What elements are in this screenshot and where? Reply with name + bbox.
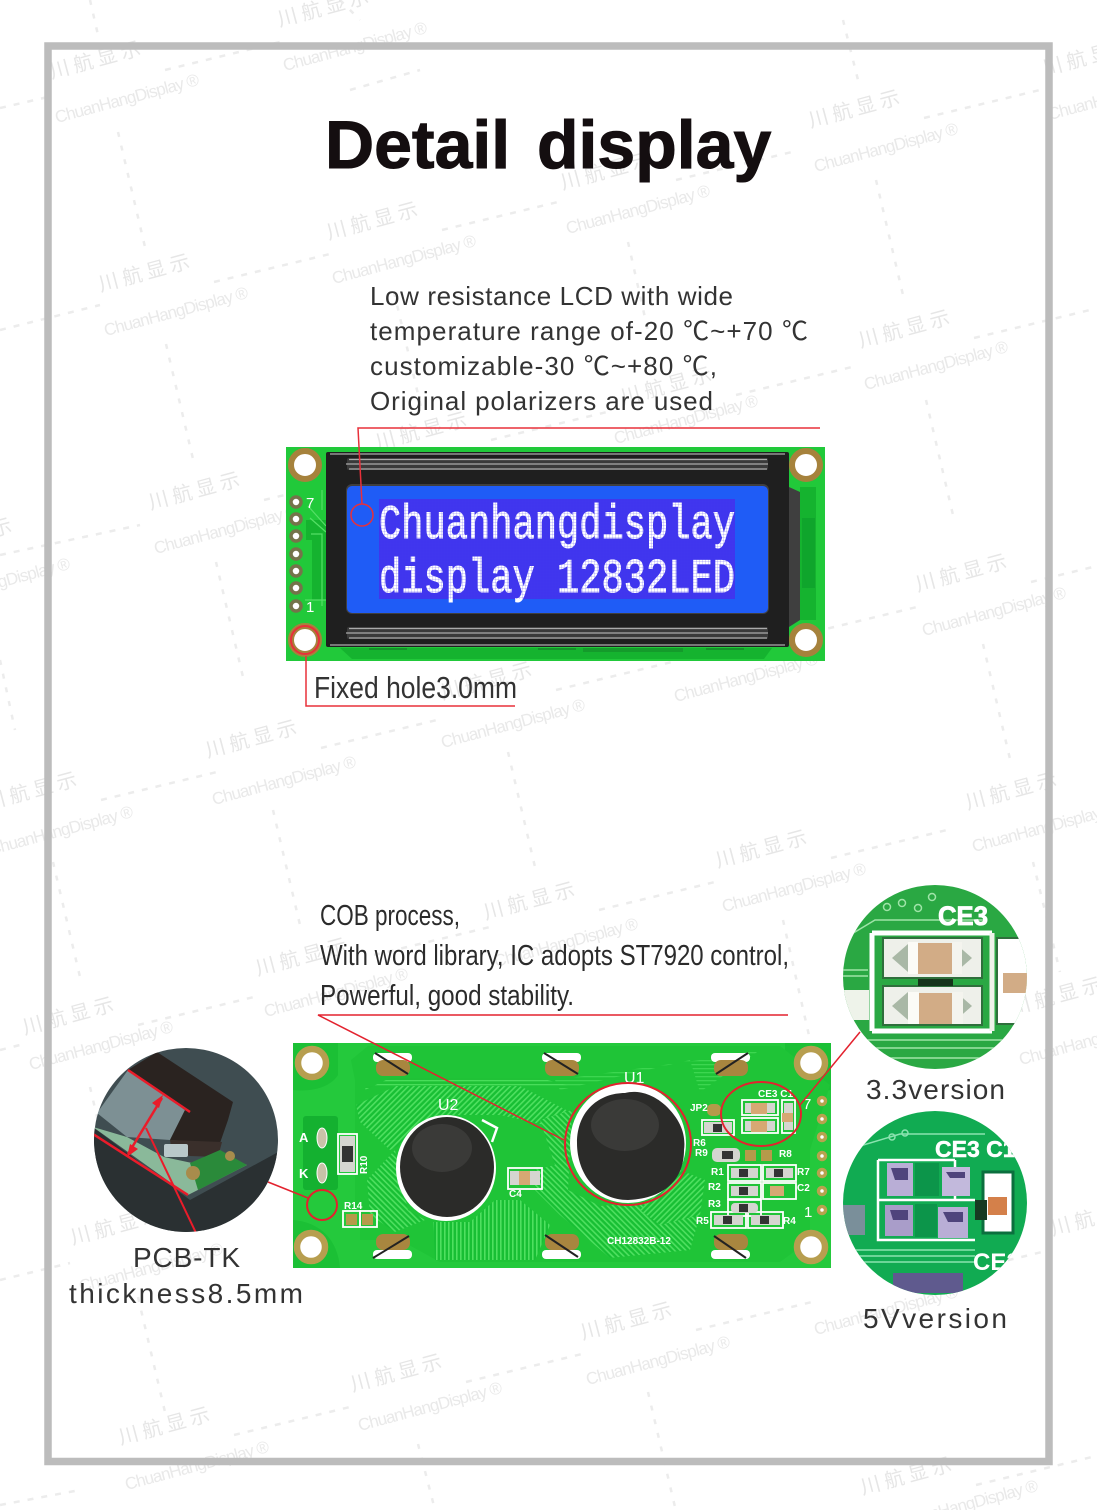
silkscreen components: JP2	[690, 1103, 708, 1114]
watermark layer: 川航显示	[963, 767, 1064, 815]
inset photo: 3.3 version	[843, 885, 1029, 1069]
callout: fixed hole	[291, 626, 517, 706]
watermark layer: 川航显示	[618, 362, 719, 410]
mounting holes	[297, 1049, 825, 1261]
pin labels	[306, 495, 314, 616]
watermark layer: ChuanHangDisplay ®	[356, 1378, 505, 1435]
watermark layer: 川航显示	[116, 1402, 217, 1450]
black plastic end	[128, 1052, 233, 1143]
watermark layer: ChuanHangDisplay ®	[27, 1017, 176, 1074]
chip U2 blob: U2	[438, 1097, 459, 1114]
text block: LCD description: temperature range of-20 ℃~+70 ℃	[370, 316, 808, 346]
chip U1 blob	[570, 1070, 686, 1203]
PCB back module	[293, 1043, 831, 1268]
mounting holes	[291, 451, 820, 654]
watermark layer: ChuanHangDisplay ®	[920, 583, 1069, 640]
silkscreen components: 1	[804, 1204, 812, 1221]
watermark layer: 川航显示	[438, 657, 539, 705]
watermark layer: 川航显示	[578, 1297, 679, 1345]
watermark layer: 川航显示	[373, 407, 474, 455]
watermark layer: ChuanHangDisplay ®	[123, 1437, 272, 1494]
chip U2 blob	[396, 1097, 497, 1221]
watermark layer: ChuanHangDisplay ®	[262, 964, 411, 1021]
watermark layer: 川航显示	[558, 147, 659, 195]
silkscreen components: C4	[509, 1189, 522, 1200]
silkscreen components: A	[299, 1130, 309, 1145]
LCD character area: display 12832LED	[379, 553, 735, 607]
watermark layer: ChuanHangDisplay ®	[720, 859, 869, 916]
silkscreen components: R8	[779, 1149, 792, 1160]
callout line: LCD	[351, 428, 820, 526]
watermark layer: 川航显示	[68, 1202, 169, 1250]
silkscreen components: R2	[708, 1182, 721, 1193]
silkscreen components: R14	[344, 1201, 363, 1212]
silkscreen components: R10	[359, 1155, 370, 1174]
watermark layer: ChuanHangDisplay ®	[812, 1282, 961, 1339]
inset photo: 5V version: CE3 C1	[935, 1136, 1016, 1162]
watermark layer: 川航显示	[913, 549, 1014, 597]
watermark layer: ChuanHangDisplay ®	[281, 18, 430, 75]
text block: COB description: Powerful, good stability.	[320, 980, 574, 1012]
text block: LCD description: Low resistance LCD with wide	[370, 281, 733, 311]
board	[93, 1127, 247, 1195]
caption: PCB thickness: thickness8.5mm	[69, 1278, 303, 1309]
board regions and trace fans	[293, 1043, 831, 1268]
watermark layer: ChuanHangDisplay ®	[612, 391, 761, 448]
inset photo: 3.3 version: CE3	[938, 901, 988, 931]
watermark layer: 川航显示	[96, 249, 197, 297]
front PCB	[286, 447, 825, 661]
caption: PCB thickness	[69, 1242, 303, 1309]
silkscreen components: 7	[803, 1096, 811, 1113]
watermark layer: ChuanHangDisplay ®	[862, 337, 1011, 394]
bezel tabs	[373, 1053, 750, 1259]
bottom edge details	[369, 648, 744, 652]
watermark layer: ChuanHangDisplay ®	[330, 231, 479, 288]
text block: LCD description: customizable-30 ℃~+80 ℃,	[370, 351, 717, 381]
callout lines: back side	[268, 1015, 860, 1220]
bezel ridges	[346, 458, 768, 639]
watermark layer: 川航显示	[20, 992, 121, 1040]
side connector	[789, 487, 800, 627]
text block: COB description	[320, 900, 789, 1012]
silkscreen components: R5	[696, 1216, 709, 1227]
watermark layer: 川航显示	[203, 715, 304, 763]
title: display	[537, 107, 771, 183]
chip U1 blob: U1	[624, 1070, 645, 1087]
LCD character area: Chuanhangdisplay	[379, 499, 735, 553]
pin pads	[291, 497, 301, 611]
watermark layer: 川航显示	[713, 825, 814, 873]
inset photo: PCB thickness	[94, 1048, 278, 1232]
watermark layer: 川航显示	[856, 305, 957, 353]
watermark layer: ChuanHangDisplay ®	[812, 119, 961, 176]
LCD front module	[286, 447, 825, 661]
caption: 3.3 version: 3.3version	[866, 1074, 1005, 1105]
silkscreen components: R1	[711, 1167, 724, 1178]
silkscreen components: K	[299, 1166, 309, 1181]
silkscreen components: CE3 C1	[758, 1089, 793, 1100]
title: Detail	[325, 107, 510, 183]
watermark layer: ChuanHangDisplay ®	[492, 914, 641, 971]
A K contacts	[317, 1128, 327, 1183]
watermark layer: 川航显示	[324, 197, 425, 245]
watermark layer: ChuanHangDisplay ®	[564, 181, 713, 238]
text block: COB description: With word library, IC adopts ST7920 control,	[320, 940, 789, 972]
caption: 5V version: 5Vversion	[863, 1303, 1007, 1334]
pin labels: 1	[306, 599, 314, 616]
watermark layer: ChuanHangDisplay ®	[102, 283, 251, 340]
title	[325, 107, 771, 183]
back PCB	[293, 1043, 831, 1268]
silkscreen components: R4	[783, 1216, 796, 1227]
text block: COB description: COB process,	[320, 900, 460, 932]
silkscreen components: CH12832B-12	[607, 1236, 671, 1247]
silkscreen components: R6	[693, 1138, 706, 1149]
watermark layer: ChuanHangDisplay ®	[210, 752, 359, 809]
watermark layer: 川航显示	[348, 1349, 449, 1397]
silkscreen components: C2	[797, 1183, 810, 1194]
watermark layer: ChuanHangDisplay ®	[439, 695, 588, 752]
callout: fixed hole: Fixed hole3.0mm	[314, 670, 517, 705]
watermark layer: 川航显示	[858, 1452, 959, 1500]
inset photo: 5V version	[843, 1111, 1027, 1295]
watermark layer: ChuanHangDisplay ®	[672, 649, 821, 706]
watermark layer: 川航显示	[806, 85, 907, 133]
watermark layer: ChuanHangDisplay ®	[77, 1239, 226, 1296]
pin labels: 7	[306, 495, 314, 512]
pin pads	[818, 1098, 826, 1214]
black bezel	[326, 452, 789, 647]
text block: LCD description	[370, 281, 808, 416]
watermark layer: 川航显示	[146, 467, 247, 515]
LED contact area	[303, 1116, 338, 1190]
text block: LCD description: Original polarizers are used	[370, 386, 713, 416]
watermark layer: 川航显示	[253, 933, 354, 981]
blue LCD panel	[347, 486, 768, 613]
silkscreen components	[299, 1089, 812, 1247]
silkscreen components: R3	[708, 1199, 721, 1210]
metal bezel side	[97, 1070, 185, 1140]
silkscreen components: R7	[797, 1167, 810, 1178]
silkscreen components: R9	[695, 1148, 708, 1159]
watermark layer: ChuanHangDisplay ®	[152, 501, 301, 558]
caption: PCB thickness: PCB-TK	[133, 1242, 240, 1273]
watermark layer: 川航显示	[481, 877, 582, 925]
watermark layer: ChuanHangDisplay ®	[584, 1332, 733, 1389]
inset photo: 5V version: CE2	[973, 1249, 1020, 1276]
watermark layer: ChuanHangDisplay ®	[53, 70, 202, 127]
clip tab	[164, 1144, 188, 1157]
watermark layer: 川航显示	[47, 36, 148, 84]
LCD character area	[379, 499, 735, 607]
red measurement marks	[93, 1070, 197, 1235]
